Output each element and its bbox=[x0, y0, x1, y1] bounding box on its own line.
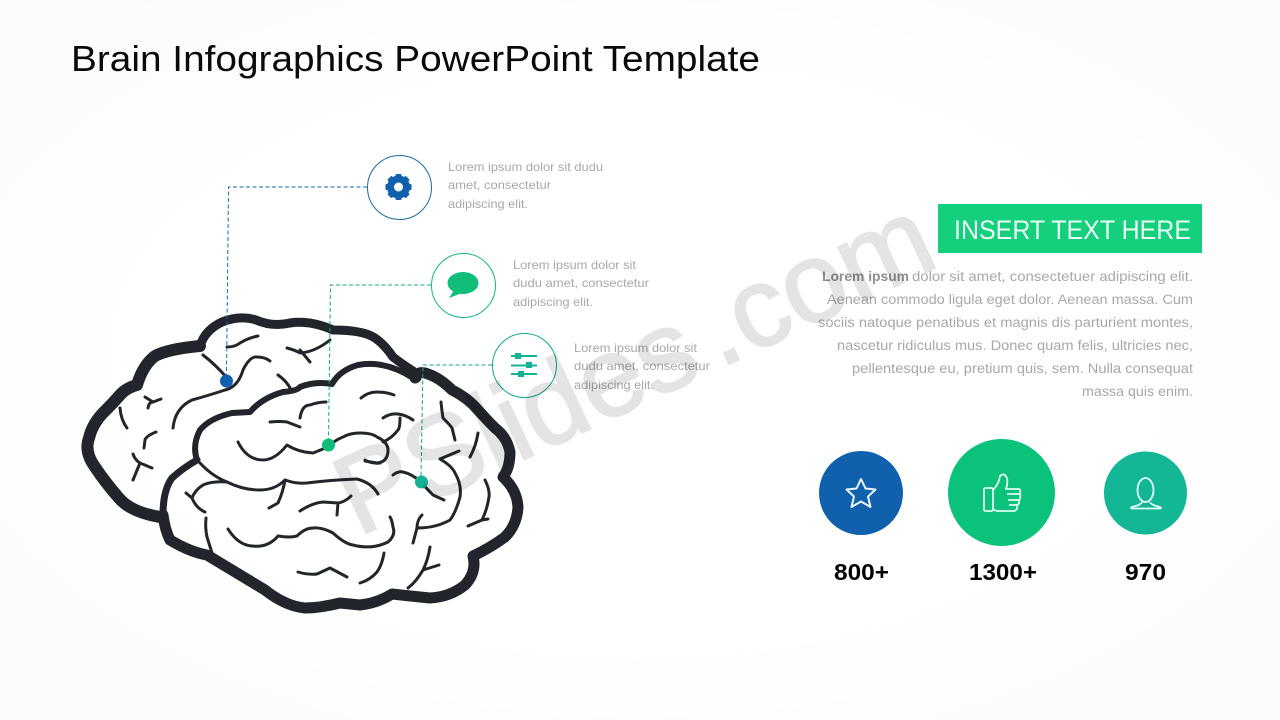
text block 3 bbox=[574, 341, 710, 392]
body paragraph bbox=[818, 269, 1193, 399]
stat: thumbs up 1300+: 1300+ bbox=[969, 559, 1037, 585]
stat: person 970: 970 bbox=[1125, 559, 1166, 585]
text block 2 bbox=[513, 258, 649, 309]
brain marker: blue bbox=[220, 374, 233, 388]
icon circle: sliders bbox=[492, 334, 556, 398]
text block 2: Lorem ipsum dolor sit bbox=[513, 258, 637, 272]
text block 2: adipiscing elit. bbox=[513, 295, 593, 309]
icon circle: gear bbox=[368, 156, 432, 220]
body paragraph: pellentesque eu, pretium quis, sem. Nulla consequat bbox=[852, 361, 1193, 376]
text block 1: adipiscing elit. bbox=[448, 197, 528, 211]
brain marker: teal bbox=[415, 476, 428, 488]
banner: insert text here bbox=[938, 204, 1202, 253]
body paragraph: sociis natoque penatibus et magnis dis parturient montes, bbox=[818, 315, 1193, 330]
text block 1: Lorem ipsum dolor sit dudu bbox=[448, 160, 603, 174]
text block 1: amet, consectetur bbox=[448, 178, 551, 192]
text block 3: adipiscing elit. bbox=[574, 378, 654, 392]
body paragraph: nascetur ridiculus mus. Donec quam felis, ultricies nec, bbox=[837, 338, 1193, 353]
stat: star 800+: 800+ bbox=[834, 559, 889, 585]
brain illustration bbox=[87, 318, 518, 608]
connector: teal dashed line bbox=[421, 365, 492, 477]
stat: star 800+ bbox=[819, 451, 903, 585]
brain marker: green bbox=[322, 438, 335, 452]
body paragraph: massa quis enim. bbox=[1082, 384, 1193, 399]
body paragraph: Aenean commodo ligula eget dolor. Aenean massa. Cum bbox=[827, 292, 1193, 307]
body paragraph: Lorem ipsum bbox=[822, 269, 909, 284]
watermark: PSlides.com bbox=[315, 172, 952, 559]
connector: blue dashed line bbox=[226, 187, 367, 375]
stat: person 970 bbox=[1104, 452, 1187, 585]
banner: insert text here: INSERT TEXT HERE bbox=[954, 215, 1191, 245]
connector: green dashed line bbox=[328, 285, 431, 440]
text block 3: dudu amet, consectetur bbox=[574, 359, 710, 373]
text block 1 bbox=[448, 160, 603, 211]
title: Brain Infographics PowerPoint Template bbox=[71, 38, 760, 79]
icon circle: speech bubble bbox=[432, 254, 496, 318]
text block 3: Lorem ipsum dolor sit bbox=[574, 341, 698, 355]
stat: thumbs up 1300+ bbox=[948, 439, 1055, 585]
text block 2: dudu amet, consectetur bbox=[513, 276, 649, 290]
body paragraph: dolor sit amet, consectetuer adipiscing elit. bbox=[912, 269, 1193, 284]
brain outer outline bbox=[87, 318, 518, 608]
brain inner folds bbox=[120, 336, 489, 588]
